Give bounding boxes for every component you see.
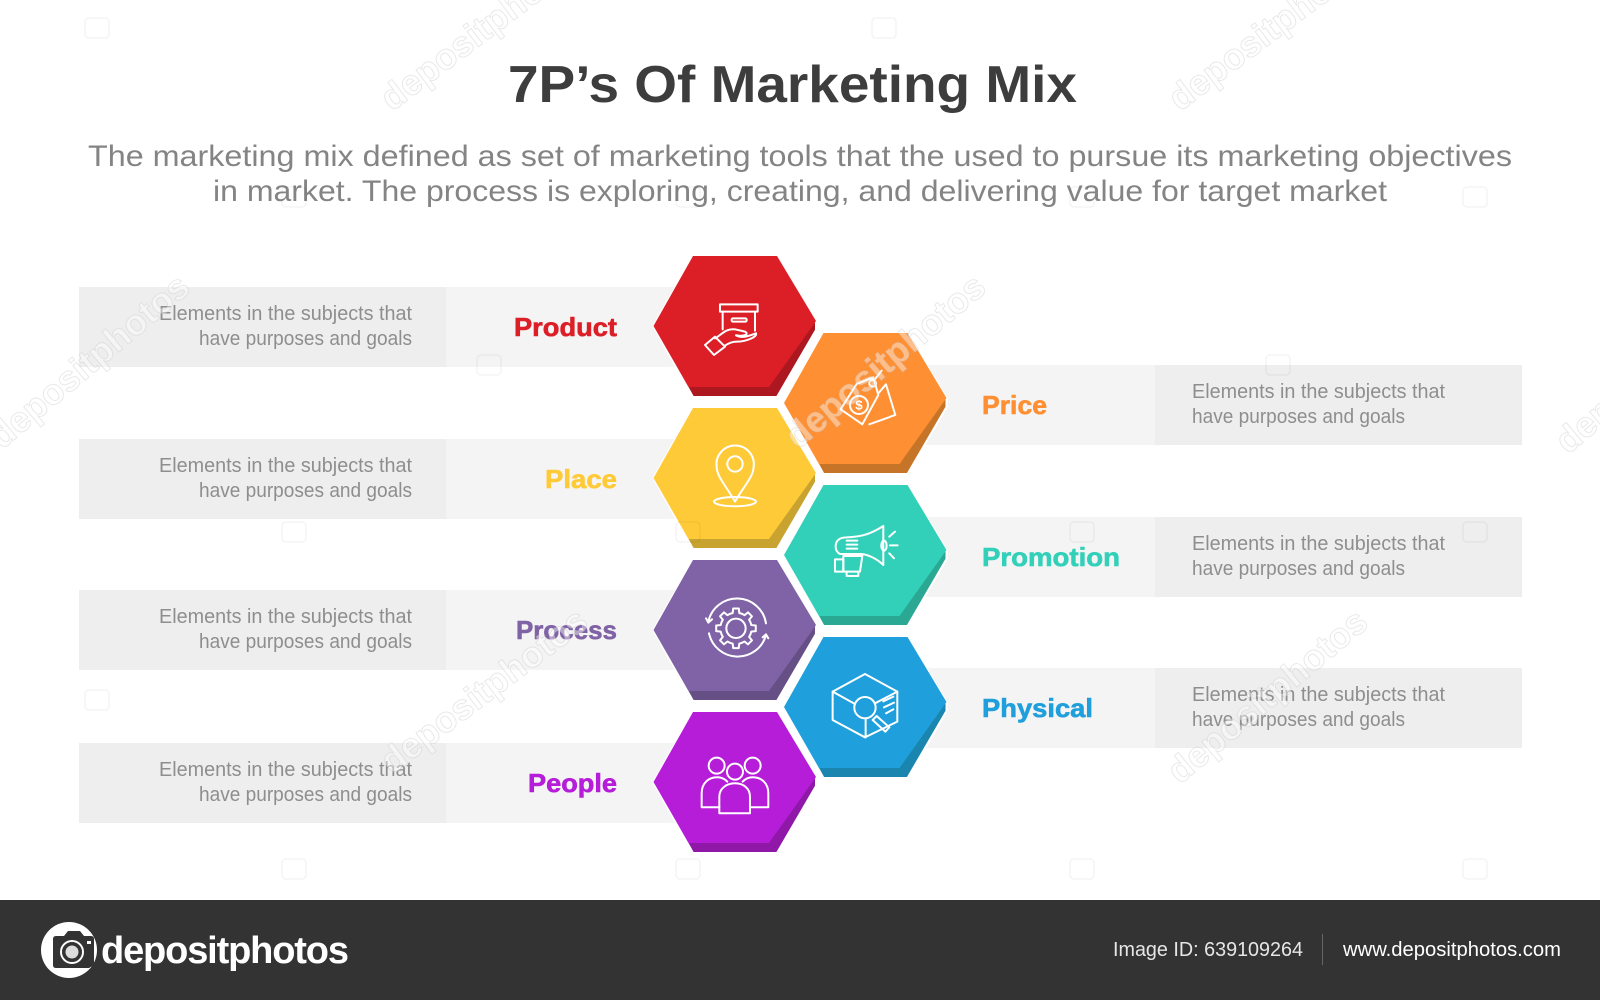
process description: Elements in the subjects that (159, 605, 412, 628)
subtitle text block: in market. The process is exploring, creating, and delivering value for target market (213, 175, 1388, 208)
product label: Product (514, 312, 617, 342)
process label: Process (516, 615, 617, 645)
icon: group of people (702, 758, 768, 813)
promotion label: Promotion (982, 542, 1120, 572)
product description (159, 302, 412, 350)
physical description: Elements in the subjects that (1192, 683, 1445, 706)
panel: price (784, 333, 1522, 474)
price description (1192, 380, 1445, 428)
panel: product (79, 256, 816, 397)
price hexagon (784, 333, 946, 474)
depositphotos logo: depositphotos (101, 930, 349, 972)
place description: Elements in the subjects that (159, 454, 412, 477)
promotion description (1192, 532, 1445, 580)
panel: people (79, 712, 816, 853)
promotion description: have purposes and goals (1192, 557, 1405, 580)
physical description (1192, 683, 1445, 731)
price label: Price (982, 390, 1047, 420)
place description (159, 454, 412, 502)
physical description: have purposes and goals (1192, 708, 1405, 731)
people hexagon (654, 712, 816, 853)
watermark camera icons (85, 18, 1487, 879)
panel: process (79, 560, 816, 701)
depositphotos logo (41, 922, 349, 978)
price description: have purposes and goals (1192, 405, 1405, 428)
title: 7P’s Of Marketing Mix (508, 56, 1077, 114)
icon: price tags (841, 371, 895, 424)
icon: price tags: $ (855, 398, 863, 413)
physical label: Physical (982, 693, 1093, 723)
promotion description: Elements in the subjects that (1192, 532, 1445, 555)
icon: gear with arrows (706, 598, 768, 657)
watermarks: depositphotos (1159, 600, 1375, 791)
icon: map pin (714, 445, 756, 506)
footer bar (0, 900, 1600, 1000)
website url: www.depositphotos.com (1342, 939, 1561, 961)
product hexagon (654, 256, 816, 397)
process description (159, 605, 412, 653)
icon: box in hand (705, 304, 758, 355)
process description: have purposes and goals (199, 630, 412, 653)
place label: Place (545, 464, 617, 494)
product description: have purposes and goals (199, 327, 412, 350)
price description: Elements in the subjects that (1192, 380, 1445, 403)
product description: Elements in the subjects that (159, 302, 412, 325)
promotion hexagon (784, 485, 946, 626)
image id: Image ID: 639109264 (1113, 939, 1303, 961)
watermarks: depositphotos (372, 599, 595, 781)
subtitle text block (88, 140, 1512, 208)
watermarks: depositphotos (777, 265, 993, 456)
panel: promotion (784, 485, 1522, 626)
people label: People (528, 768, 617, 798)
panel: place (79, 408, 816, 549)
panel: physical (784, 637, 1522, 778)
watermarks (0, 0, 1600, 791)
place description: have purposes and goals (199, 479, 412, 502)
people description: have purposes and goals (199, 783, 412, 806)
icon: megaphone (835, 526, 898, 576)
process hexagon (654, 560, 816, 701)
icon: box with magnifier (833, 674, 897, 737)
subtitle text block: The marketing mix defined as set of marketing tools that the used to pursue its marketing objectives (88, 140, 1512, 173)
place hexagon (654, 408, 816, 549)
people description: Elements in the subjects that (159, 758, 412, 781)
people description (159, 758, 412, 806)
physical hexagon (784, 637, 946, 778)
